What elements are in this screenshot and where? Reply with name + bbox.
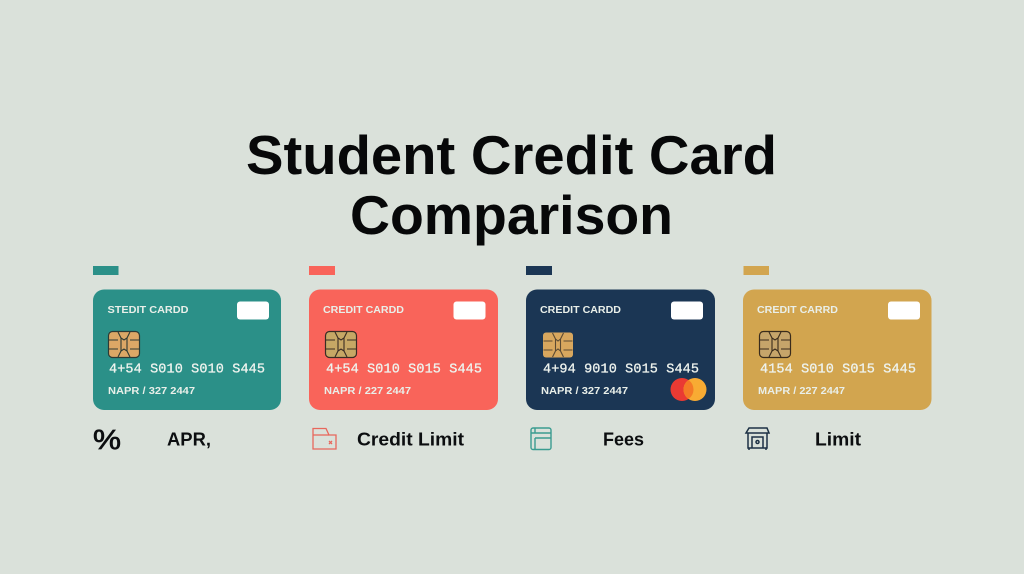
panel: navy card [526,290,715,410]
panel: coral card: CREDIT CARDD [323,304,404,316]
accent bar: navy [526,266,552,275]
panel: navy card: CREDIT CARDD [540,304,621,316]
panel: teal card: NAPR / 327 2447 [108,386,195,397]
panel: coral card: NAPR / 227 2447 [324,386,411,397]
icon: percent: % [93,424,121,455]
panel: gold card [743,290,932,410]
panel: teal card: STEDIT CARDD [108,304,189,316]
label: APR: APR, [167,430,211,450]
accent bar: teal [93,266,118,275]
icon: wallet [313,428,336,449]
icon: chip [326,332,356,358]
panel: gold card: MAPR / 227 2447 [758,386,845,397]
panel: teal card: 4+54 S010 S010 S445 [109,362,265,378]
panel: teal card [93,290,281,410]
title: Student Credit Card [246,124,777,186]
panel: gold card: CREDIT CARRD [757,304,838,316]
icon: chip [108,332,140,358]
icon: chip [760,332,790,358]
title: Comparison [350,184,673,246]
panel: coral card: 4+54 S010 S015 S445 [326,362,482,378]
panel: navy card: NAPR / 327 2447 [541,386,628,397]
label: Limit: Limit [815,430,861,450]
icon: storefront [746,428,769,450]
panel: coral card [309,290,498,410]
panel: gold card: 4154 S010 S015 S445 [760,362,916,378]
title [246,124,777,246]
icon: document tray [531,428,551,450]
icon: chip [543,332,573,358]
label: Fees: Fees [603,430,644,450]
accent bar: gold [744,266,769,275]
icon: card network logo [670,378,706,401]
accent bar: coral [309,266,335,275]
panel: navy card: 4+94 9010 S015 S445 [543,362,699,378]
label: Credit Limit: Credit Limit [357,430,464,450]
